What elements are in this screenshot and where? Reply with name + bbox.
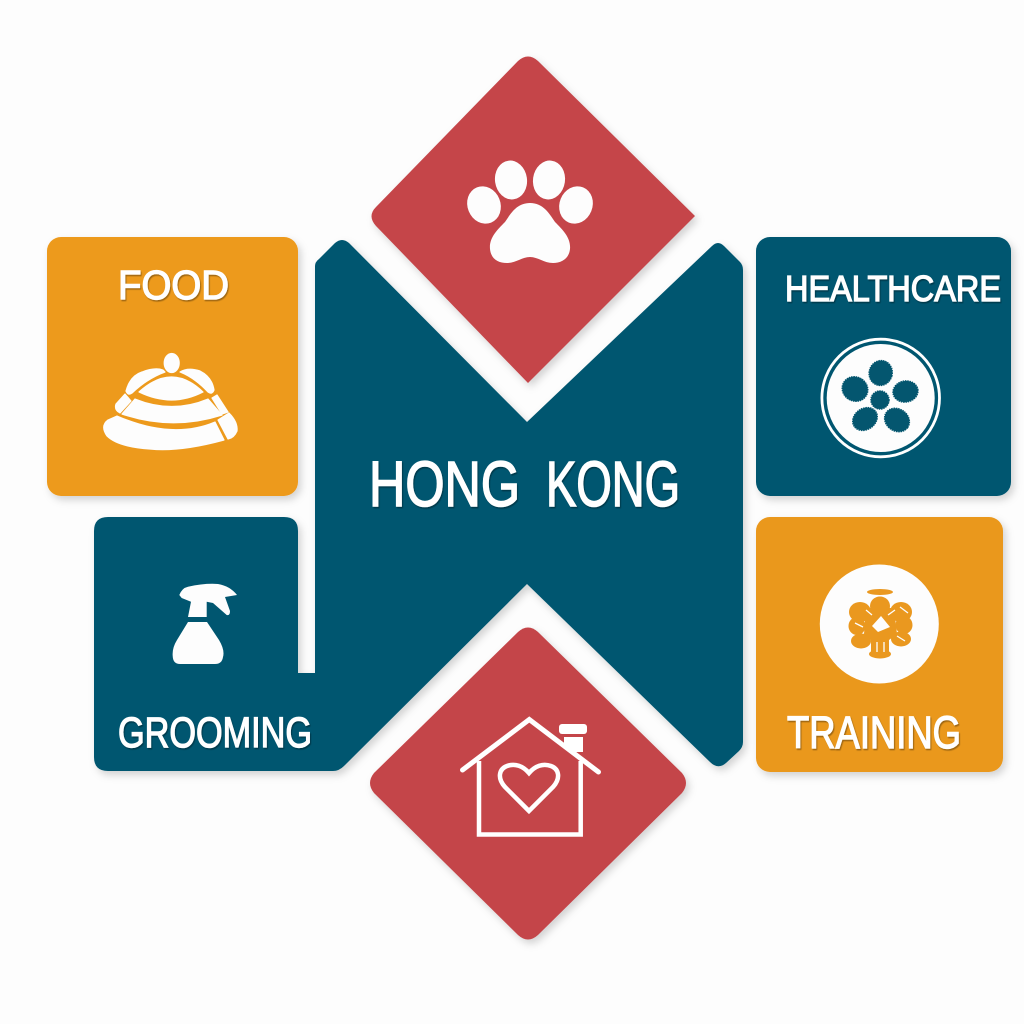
icon: food dish: [104, 354, 237, 450]
icon: spray bottle: [173, 584, 237, 664]
panel: healthcare: [756, 237, 1011, 496]
heading: food: FOOD: [118, 262, 229, 308]
title: Hong Kong: KONG: [546, 448, 680, 520]
heading: healthcare: HEALTHCARE: [785, 268, 1001, 309]
heading: grooming: GROOMING: [118, 709, 312, 757]
title: Hong Kong: HONG: [369, 448, 520, 520]
panel: paw diamond: [372, 56, 695, 383]
panel: central Hong Kong shape with grooming: [94, 240, 743, 771]
panel: home diamond: [370, 628, 686, 940]
heading: training: TRAINING: [787, 707, 961, 758]
panel: training: [756, 517, 1003, 772]
icon: paw print: [462, 158, 598, 263]
icon: house with heart: [462, 720, 598, 834]
icon: training emblem: [820, 564, 939, 684]
panel: food: [47, 237, 298, 496]
icon: healthcare flower badge: [822, 339, 940, 457]
title: Hong Kong: [369, 448, 680, 520]
